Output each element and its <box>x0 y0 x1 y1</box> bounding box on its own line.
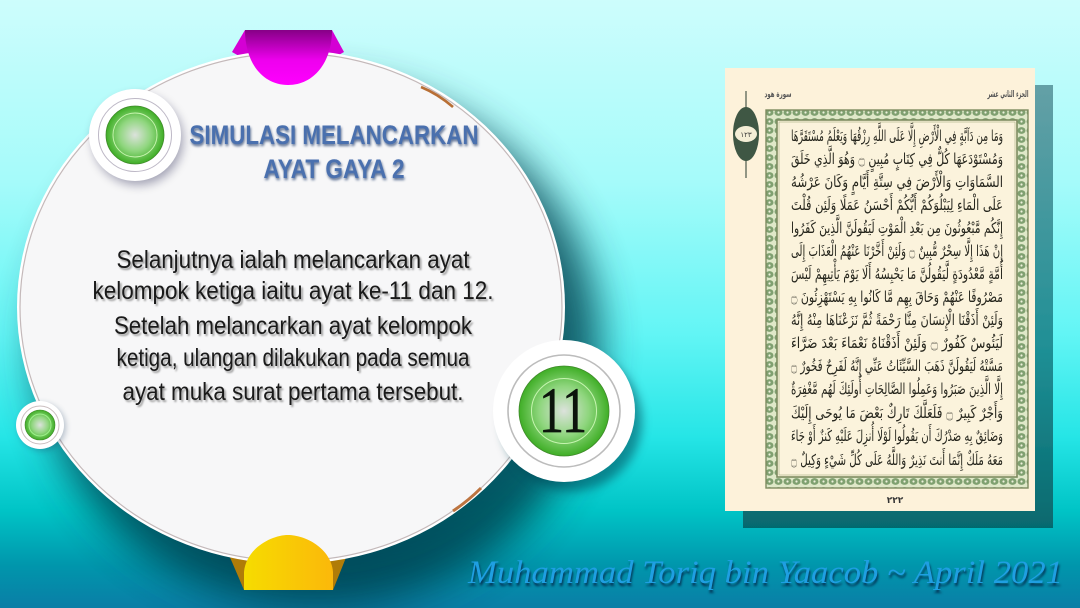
Arabic text block: لَيَئُوسٌ كَفُورٌ ۝ وَلَئِنْ أَذَقْنَاهُ نَعْمَاءَ بَعْدَ ضَرَّاءَ <box>791 330 1003 352</box>
title <box>190 120 478 184</box>
yellow tab flaps <box>229 555 347 590</box>
title: SIMULASI MELANCARKAN <box>190 120 478 150</box>
Arabic text block: وَأَجْرٌ كَبِيرٌ ۝ فَلَعَلَّكَ تَارِكٌ بَعْضَ مَا يُوحَى إِلَيْكَ <box>791 400 1003 425</box>
Arabic text block: مَصْرُوفًا عَنْهُمْ وَحَاقَ بِهِم مَّا كَانُوا بِهِ يَسْتَهْزِئُونَ ۝ <box>791 288 1003 309</box>
decorative brown arc bottom <box>453 488 481 511</box>
body text: ayat muka surat pertama tersebut. <box>122 378 464 406</box>
number 11: 11 <box>539 375 587 447</box>
magenta tab flaps <box>232 30 344 60</box>
body text: ketiga, ulangan dilakukan pada semua <box>116 344 470 372</box>
Arabic text block: أُمَّةٍ مَّعْدُودَةٍ لَّيَقُولُنَّ مَا يَحْبِسُهُ أَلَا يَوْمَ يَأْتِيهِمْ لَيْسَ <box>791 259 1003 286</box>
main white circle panel <box>17 50 565 564</box>
body text: Selanjutnya ialah melancarkan ayat <box>116 246 470 274</box>
number badge 11 <box>493 340 642 491</box>
side ornament: ١٢٣ <box>740 131 752 139</box>
page header right: الجزء الثاني عشر <box>987 90 1028 100</box>
title: AYAT GAYA 2 <box>264 154 404 184</box>
page header left: سورة هود <box>764 90 792 100</box>
ornamental frame <box>766 110 1028 488</box>
Arabic text block: السَّمَاوَاتِ وَالْأَرْضَ فِي سِتَّةِ أَيَّامٍ وَكَانَ عَرْشُهُ <box>791 169 1003 195</box>
shadow of Quran page <box>743 85 1053 528</box>
page number: ٢٢٢ <box>887 496 904 506</box>
Arabic text block <box>791 123 1003 472</box>
yellow bottom tab <box>244 535 333 590</box>
body text <box>92 246 494 406</box>
side ornament <box>733 91 759 178</box>
Arabic text block: إِنْ هَذَا إِلَّا سِحْرٌ مُّبِينٌ ۝ وَلَئِنْ أَخَّرْنَا عَنْهُمُ الْعَذَابَ إِلَى <box>791 238 1003 263</box>
magenta top tab <box>245 30 332 85</box>
author credit: Muhammad Toriq bin Yaacob ~ April 2021 <box>467 555 1063 591</box>
body text: kelompok ketiga iaitu ayat ke-11 dan 12. <box>92 277 494 305</box>
main circle shadow <box>36 83 600 607</box>
Arabic text block: وَلَئِنْ أَذَقْنَا الْإِنسَانَ مِنَّا رَحْمَةً ثُمَّ نَزَعْنَاهَا مِنْهُ إِنَّهُ <box>791 307 1003 332</box>
Arabic text block: إِنَّكُم مَّبْعُوثُونَ مِن بَعْدِ الْمَوْتِ لَيَقُولَنَّ الَّذِينَ كَفَرُوا <box>791 215 1003 240</box>
Quran page panel <box>725 68 1035 511</box>
small left badge <box>16 401 66 451</box>
Arabic text block: وَمُسْتَوْدَعَهَا كُلٌّ فِي كِتَابٍ مُبِينٍ ۝ وَهُوَ الَّذِي خَلَقَ <box>791 145 1003 172</box>
title badge <box>89 89 183 185</box>
decorative brown arc top <box>421 87 453 107</box>
Arabic text block: عَلَى الْمَاءِ لِيَبْلُوَكُمْ أَيُّكُمْ أَحْسَنُ عَمَلًا وَلَئِن قُلْتَ <box>791 192 1003 214</box>
body text: Setelah melancarkan ayat kelompok <box>114 312 472 340</box>
